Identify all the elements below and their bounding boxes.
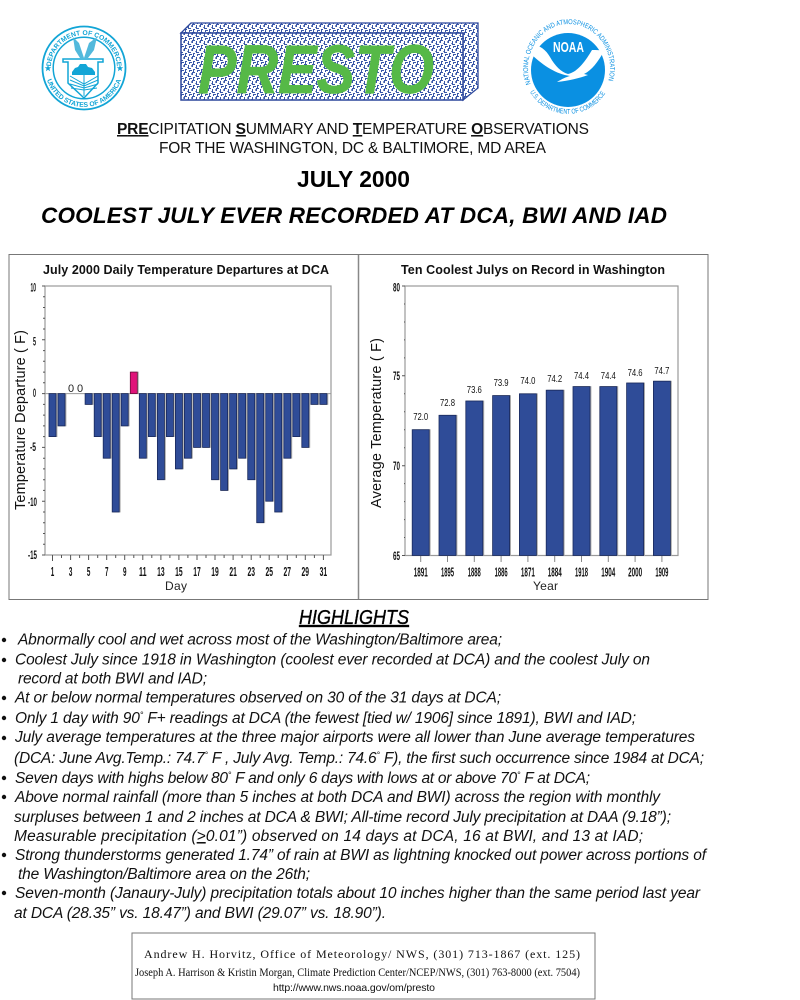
logo: PRESTO block: PRESTO: [198, 31, 434, 108]
subtitle: program name: [117, 121, 589, 157]
logo: NOAA: NATIONAL OCEANIC AND ATMOSPHERIC ADMINISTRATION: [523, 19, 615, 86]
x axis labels: 1: [51, 564, 54, 579]
text block: highlights list: the Washington/Baltimore area on the 26th;: [18, 866, 310, 883]
text block: highlights list: record at both BWI and IAD;: [18, 670, 207, 688]
text block: highlights list: Only 1 day with 90: [15, 710, 140, 727]
text block: highlights list: °: [376, 750, 380, 760]
x axis labels: 29: [302, 564, 309, 579]
x axis labels: 15: [175, 564, 183, 579]
text block: highlights list: Strong thunderstorms generated 1.74” of rain at BWI as lightning knocked out power across portions of: [15, 847, 708, 864]
x axis labels: 11: [139, 564, 147, 579]
x axis labels: 31: [320, 564, 327, 579]
panel: ten coolest Julys chart: 1909: [655, 564, 668, 580]
value labels: 72.8: [440, 398, 455, 409]
text block: highlights list: F at DCA;: [520, 770, 590, 787]
plot frame and ticks: [402, 286, 678, 562]
panel: daily temperature departures chart: [13, 263, 331, 593]
text block: highlights list: °: [204, 750, 208, 760]
value labels: 72.0: [413, 412, 429, 423]
value labels: 74.2: [547, 374, 563, 385]
y axis labels: [393, 282, 400, 563]
x axis labels: 13: [157, 564, 165, 579]
x axis labels: 19: [211, 564, 219, 579]
text block: highlights list: Above normal rainfall (more than 5 inches at both DCA and BWI) across the region with monthly: [14, 789, 661, 806]
zero value labels: 00: [68, 383, 83, 395]
heading: highlights: HIGHLIGHTS: [299, 607, 410, 629]
value labels: 73.9: [494, 378, 509, 389]
x axis labels: [51, 564, 327, 579]
text block: highlights list: F+ readings at DCA (the fewest [tied w/ 1906] since 1891), BWI and IAD;: [143, 710, 636, 727]
y axis labels: 0: [33, 388, 36, 400]
y axis title: Temperature Departure ( F): [13, 330, 29, 510]
text block: highlights list: [2, 632, 708, 922]
logo: NOAA: U.S. DEPARTMENT OF COMMERCE: [530, 90, 606, 114]
subtitle: program name: FOR THE WASHINGTON, DC & BALTIMORE, MD AREA: [159, 140, 547, 157]
x axis labels: 1918: [575, 564, 588, 580]
logo: Department of Commerce seal: UNITED STATES OF AMERICA: [48, 78, 122, 107]
value labels: 74.7: [654, 366, 670, 377]
y axis title: Average Temperature ( F): [369, 338, 385, 508]
text block: highlights list: Measurable precipitation (>0.01”) observed on 14 days at DCA, 16 at BWI, and 13 at IAD;: [14, 828, 643, 845]
y axis labels: 80: [393, 282, 400, 294]
y axis labels: -5: [30, 442, 36, 454]
x axis labels: 17: [193, 564, 201, 579]
x axis labels: 23: [247, 564, 255, 579]
text block: highlights list: surpluses between 1 and 2 inches at DCA & BWI; All-time record July precipitation at DAA (9.18”);: [14, 809, 671, 826]
text block: highlights list: Seven days with highs below 80: [15, 770, 228, 787]
text block: highlights list: July average temperatures at the three major airports were all lower than June average temperatures: [14, 729, 695, 746]
value labels: [413, 366, 670, 423]
plot frame and ticks: [42, 286, 331, 561]
text block: highlights list: °: [517, 770, 521, 780]
x axis labels: [414, 564, 668, 580]
credit line 1: Andrew H. Horvitz, Office of Meteorology/ NWS, (301) 713-1867 (ext. 125): [144, 947, 580, 961]
value labels: 74.6: [628, 368, 643, 379]
logo: Department of Commerce seal: [42, 26, 126, 110]
y axis labels: 65: [393, 551, 400, 563]
text block: highlights list: °: [140, 710, 144, 720]
x axis labels: 27: [284, 564, 291, 579]
x axis labels: 9: [123, 564, 126, 579]
text block: highlights list: Seven-month (Janaury-July) precipitation totals about 10 inches higher than the same period last year: [15, 885, 701, 902]
text block: highlights list: °: [228, 770, 232, 780]
x axis title: Day: [165, 579, 187, 593]
bars: [412, 381, 670, 556]
text block: highlights list: Coolest July since 1918 in Washington (coolest ever recorded at DCA) and the coolest July on: [15, 652, 650, 668]
logo: NOAA: NOAA: [553, 39, 584, 56]
x axis labels: 2000: [628, 564, 642, 580]
x axis labels: 1886: [495, 564, 508, 580]
text block: highlights list: F), the first such occurrence since 1984 at DCA;: [380, 750, 704, 767]
x axis labels: 1904: [601, 564, 616, 580]
x axis labels: 1888: [468, 564, 481, 580]
value labels: 73.6: [467, 385, 482, 396]
credit line 2: Joseph A. Harrison & Kristin Morgan, Climate Prediction Center/NCEP/NWS, (301) 763-8000 (ext. 7504): [135, 965, 580, 979]
panel: contact credits: [132, 933, 595, 999]
value labels: 74.4: [574, 371, 589, 382]
text block: highlights list: F and only 6 days with lows at or above 70: [231, 770, 518, 787]
text block: highlights list: F , July Avg. Temp.: 74.6: [208, 750, 377, 767]
x axis labels: 1871: [521, 564, 535, 580]
text block: highlights list: (DCA: June Avg.Temp.: 74.7: [14, 750, 205, 767]
y axis labels: -15: [28, 550, 37, 562]
y axis labels: [28, 282, 37, 562]
text block: highlights list: at DCA (28.35” vs. 18.47”) and BWI (29.07” vs. 18.90”).: [14, 905, 386, 922]
y axis labels: 70: [393, 461, 400, 473]
x axis labels: 1891: [414, 564, 428, 580]
chart title: July 2000 Daily Temperature Departures at DCA: [43, 263, 329, 277]
bars: [49, 372, 327, 523]
subtitle: program name: PRECIPITATION SUMMARY AND TEMPERATURE OBSERVATIONS: [117, 121, 589, 138]
text block: highlights list: At or below normal temperatures observed on 30 of the 31 days at DCA;: [14, 690, 501, 706]
x axis labels: 5: [87, 564, 90, 579]
y axis labels: 5: [33, 336, 36, 348]
x axis labels: 25: [265, 564, 273, 579]
chart title: Ten Coolest Julys on Record in Washington: [401, 263, 665, 277]
x axis labels: 21: [229, 564, 237, 579]
heading: main title: COOLEST JULY EVER RECORDED AT DCA, BWI AND IAD: [41, 203, 667, 228]
y axis labels: 75: [393, 371, 400, 383]
heading: month: JULY 2000: [297, 166, 410, 192]
bullets: [2, 638, 6, 895]
panel: ten coolest Julys chart: [369, 263, 678, 593]
value labels: 74.4: [601, 371, 616, 382]
logo: NOAA: [523, 19, 615, 114]
website: http://www.nws.noaa.gov/om/presto: [273, 982, 435, 994]
x axis labels: 3: [69, 564, 72, 579]
logo: Department of Commerce seal: DEPARTMENT OF COMMERCE: [46, 30, 122, 66]
panel: charts frame: [9, 254, 708, 600]
x axis labels: 7: [105, 564, 108, 579]
text block: highlights list: Abnormally cool and wet across most of the Washington/Baltimore area;: [17, 632, 502, 648]
y axis labels: -10: [28, 497, 37, 509]
x axis title: Year: [533, 579, 558, 593]
value labels: 74.0: [520, 376, 536, 387]
x axis labels: 1895: [441, 564, 454, 580]
y axis labels: 10: [30, 282, 36, 294]
x axis labels: 1884: [548, 564, 562, 580]
